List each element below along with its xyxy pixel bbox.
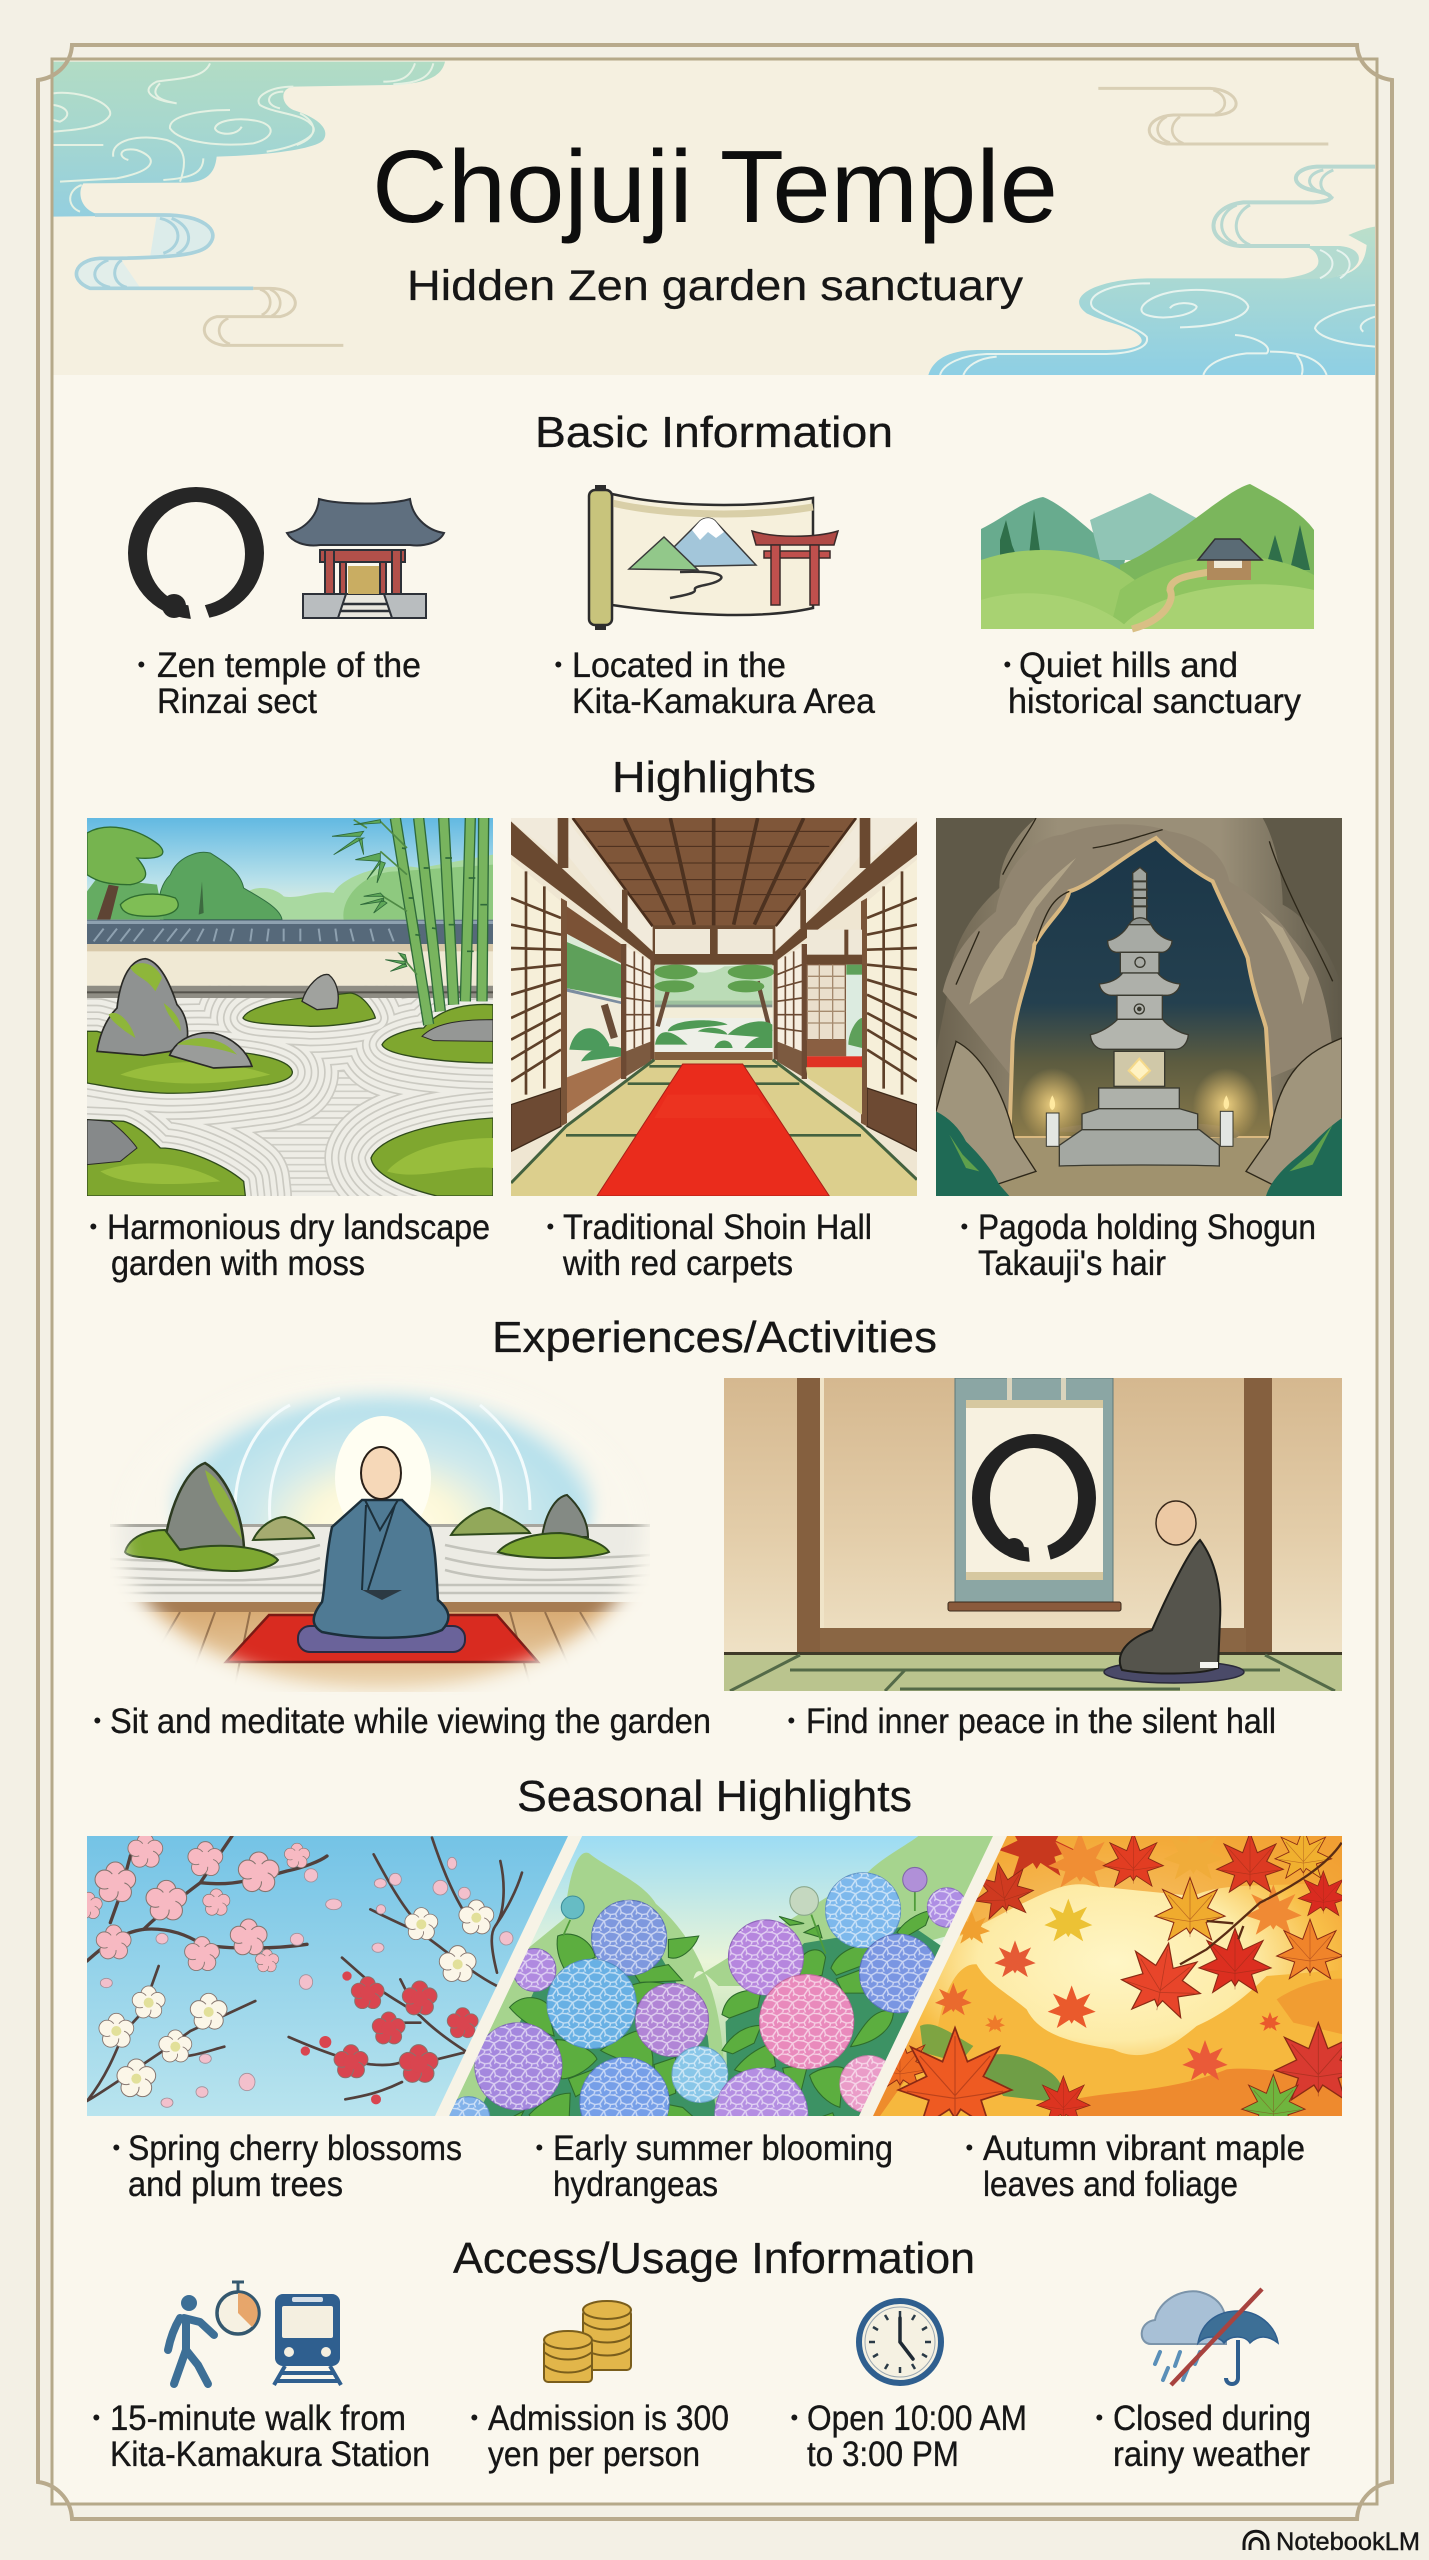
caption: spring: • [112,2135,120,2160]
caption: admission: • [470,2405,478,2430]
heading: Basic Information: Basic Information [535,408,893,457]
caption: location: Kita-Kamakura Area [572,682,876,721]
caption: closed: rainy weather [1113,2435,1310,2474]
caption: location [554,646,876,721]
seasonal panel: autumn maple [873,1836,1342,2116]
caption: meditate: • [94,1708,101,1733]
caption: walk: Kita-Kamakura Station [110,2435,430,2474]
caption: summer [536,2129,893,2204]
caption: dry landscape [90,1208,490,1283]
decorative waves left [53,62,445,345]
caption: spring: and plum trees [128,2165,343,2204]
caption: dry landscape: garden with moss [111,1244,365,1283]
caption: walk: 15-minute walk from [110,2399,406,2438]
caption: quiet hills [1004,646,1301,721]
title: Chojuji Temple [372,129,1058,244]
caption: hours: Open 10:00 AM [807,2399,1027,2438]
caption: walk [92,2399,430,2474]
caption: pagoda: Takauji's hair [978,1244,1166,1283]
heading: Seasonal Highlights: Seasonal Highlights [517,1772,912,1821]
caption: autumn [966,2129,1305,2204]
heading: Access/Usage Information: Access/Usage Information [453,2234,975,2283]
heading: Highlights: Highlights [612,753,816,802]
caption: summer: • [536,2135,543,2160]
decorative waves right [928,88,1375,375]
caption: pagoda: • [960,1214,968,1239]
caption: location: Located in the [572,646,786,685]
seasonal panel: spring blossoms [75,1833,587,2116]
caption: hours: to 3:00 PM [807,2435,959,2474]
icon: landscape hills [981,484,1314,629]
caption: meditate: Sit and meditate while viewing the garden [110,1702,711,1741]
divider strips between seasons [435,1836,1007,2116]
NotebookLM logo: NotebookLM [1276,2528,1420,2556]
caption: location: • [554,652,562,677]
caption: summer: hydrangeas [553,2165,718,2204]
caption: Shoin hall [546,1208,872,1283]
caption: Shoin hall: • [546,1214,554,1239]
icon: rain cloud, umbrella, no entry slash [1142,2289,1278,2385]
icon: walker, stopwatch and train [168,2282,341,2385]
caption: closed [1096,2399,1311,2474]
caption: autumn: Autumn vibrant maple [983,2129,1305,2168]
caption: Zen temple [138,646,421,721]
caption: dry landscape: Harmonious dry landscape [107,1208,490,1247]
caption: hours [790,2399,1027,2474]
subtitle: Hidden Zen garden sanctuary [407,262,1024,310]
caption: pagoda: Pagoda holding Shogun [978,1208,1316,1247]
caption: walk: • [92,2405,100,2430]
illustration: dry landscape garden [87,818,493,1196]
caption: admission: yen per person [488,2435,700,2474]
caption: closed: Closed during [1113,2399,1311,2438]
seasonal panel: summer hydrangeas [449,1836,993,2116]
illustration: monk facing scroll [724,1378,1342,1691]
caption: Zen temple: • [138,652,145,677]
caption: dry landscape: • [90,1214,97,1239]
icon: map scroll [589,485,838,630]
caption: quiet hills: historical sanctuary [1008,682,1301,721]
caption: inner peace: Find inner peace in the silent hall [806,1702,1276,1741]
caption: autumn: • [966,2135,973,2160]
caption: summer: Early summer blooming [553,2129,893,2168]
icon: enso circle [128,487,264,625]
caption: admission [470,2399,729,2474]
caption: Shoin hall: with red carpets [562,1244,793,1283]
icon: temple [287,499,444,618]
icon: coins [544,2301,631,2382]
header band with clouds [52,59,1377,375]
illustration: Shoin hall with red carpet [511,818,917,1196]
caption: quiet hills: • [1004,652,1011,677]
caption: hours: • [790,2405,798,2430]
caption: Shoin hall: Traditional Shoin Hall [563,1208,872,1247]
caption: Zen temple: Rinzai sect [157,682,317,721]
caption: autumn: leaves and foliage [983,2165,1238,2204]
caption: inner peace: • [788,1708,795,1733]
caption: spring [112,2129,462,2204]
caption: quiet hills: Quiet hills and [1019,646,1238,685]
caption: Zen temple: Zen temple of the [157,646,421,685]
caption: admission: Admission is 300 [488,2399,729,2438]
illustration: seated meditation [110,1365,650,1695]
caption: spring: Spring cherry blossoms [128,2129,462,2168]
icon: clock [859,2301,941,2383]
caption: pagoda [960,1208,1316,1283]
heading: Experiences/Activities: Experiences/Activities [492,1313,937,1362]
caption: closed: • [1096,2405,1103,2430]
illustration: pagoda in cave [936,818,1342,1196]
